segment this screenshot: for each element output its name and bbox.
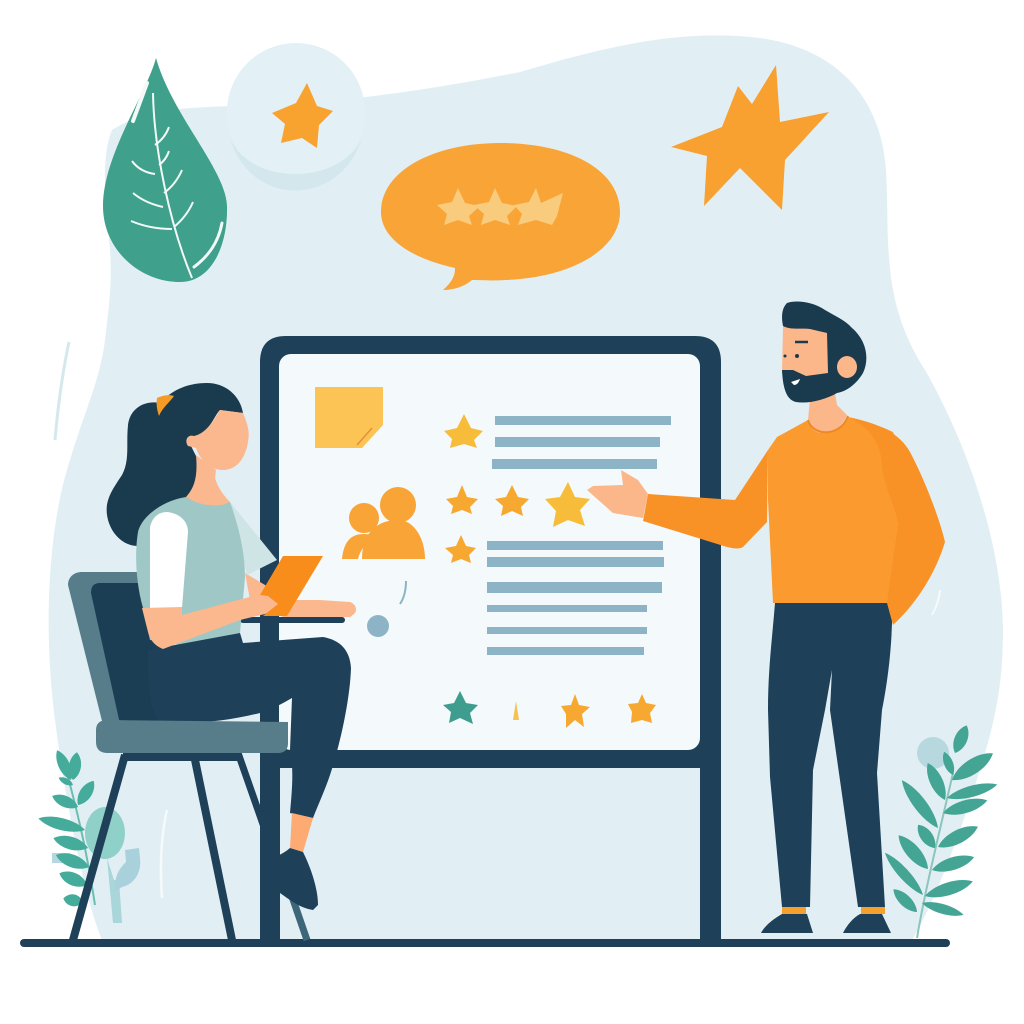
rating stars [443,414,656,728]
left edge mark [55,342,69,440]
plant left [37,748,99,908]
circle behind small star [227,43,365,181]
white streak under chair [161,810,167,898]
man eye left [784,354,786,358]
sticky note [315,387,383,448]
icon: large star [671,65,829,210]
plant right [881,723,999,938]
man ear [837,356,857,378]
man face [782,326,830,378]
board [260,336,721,942]
woman ponytail and hair [107,383,243,546]
chair legs [73,750,307,940]
man arm [643,450,768,548]
small ball [367,615,389,637]
white streak right [932,590,940,615]
woman and chair [68,383,356,940]
man legs [768,603,892,907]
man hair and beard [782,301,866,403]
woman far sleeve [230,502,277,575]
man shoe left [761,914,813,933]
man shoe right [843,914,891,933]
man eye right [795,354,799,358]
ground line [20,939,950,947]
text lines [487,416,671,655]
man smile [791,379,800,385]
man collar [808,416,848,432]
man sock left [782,907,806,914]
woman face [186,410,249,470]
woman sleeve [150,512,188,608]
woman shin [290,813,313,852]
man brow [795,341,808,343]
chair back inner [91,583,175,724]
hair tie [157,395,174,416]
woman trousers [148,633,351,818]
man sock right [861,907,885,914]
speech bubble with stars [381,143,620,290]
chair seat [96,720,288,753]
woman near arm [142,594,277,649]
man sweater body [768,417,905,603]
woman neck [186,455,230,506]
icon: small star [272,83,333,148]
plant left pale shapes [52,807,140,923]
man [587,301,945,933]
chair brace [123,752,237,761]
icon: people [342,487,425,559]
man hand [587,470,648,518]
chair back [68,572,165,725]
small mark [400,581,406,604]
desk arm [240,617,345,623]
woman shoe [263,848,318,910]
crescent under small star [230,138,362,190]
woman top [136,497,245,645]
icon: leaf [103,58,227,282]
far arm [245,573,356,618]
man right sleeve [848,417,945,625]
man neck [808,393,847,433]
tablet [260,556,323,616]
